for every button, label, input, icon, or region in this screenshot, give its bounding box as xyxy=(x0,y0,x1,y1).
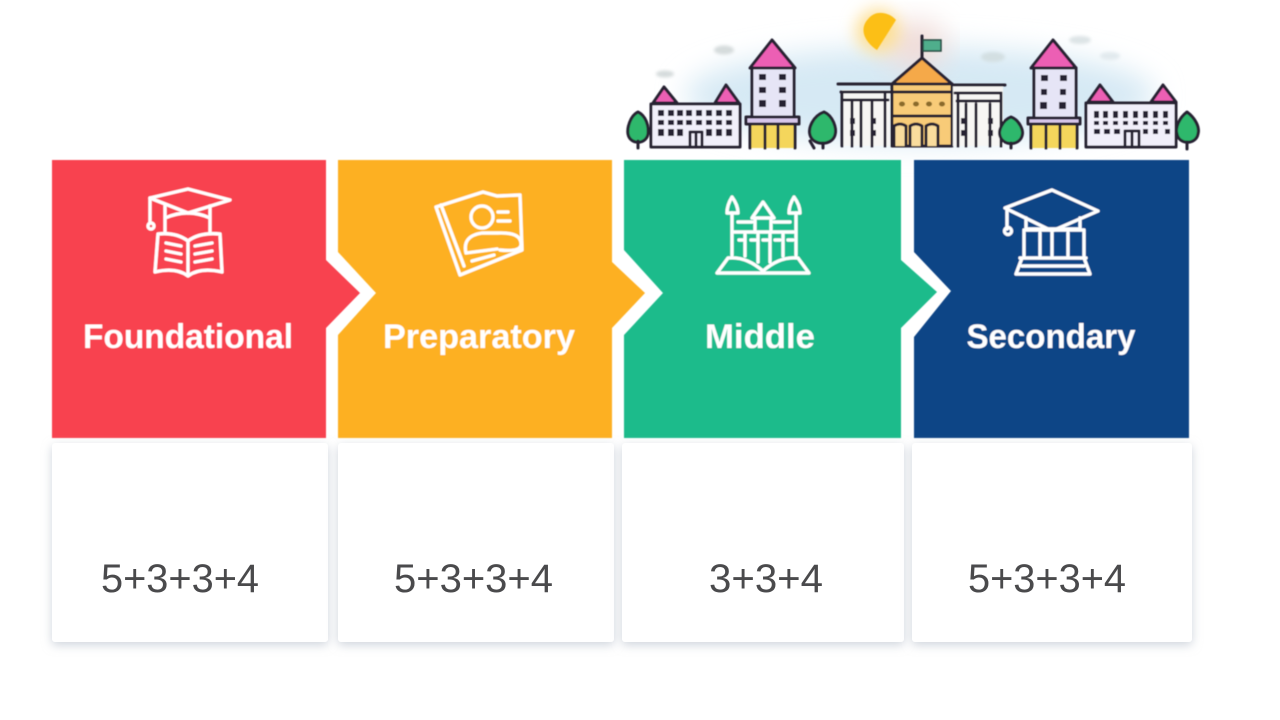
panel: Preparatory stage xyxy=(338,160,645,438)
card: Middle structure xyxy=(622,443,904,642)
value: 5+3+3+4 xyxy=(101,557,259,601)
icon: tree 3 xyxy=(1000,117,1022,148)
value: 5+3+3+4 xyxy=(968,557,1126,601)
building: right school xyxy=(1086,85,1176,147)
icon: sun xyxy=(856,9,900,53)
building: right colonnade xyxy=(953,85,1005,146)
panel: Middle stage xyxy=(624,160,937,438)
icon: graduation cap over open book xyxy=(148,189,230,276)
value: 3+3+4 xyxy=(709,557,823,601)
building: tower 1 xyxy=(746,40,799,148)
icon: graduation cap over institution xyxy=(1004,190,1098,274)
illustration: campus skyline xyxy=(628,9,1198,149)
icon: tree 4 xyxy=(1176,112,1198,149)
foundational header xyxy=(52,160,360,438)
building: left colonnade xyxy=(838,84,890,146)
building: left school xyxy=(651,85,740,147)
label: Secondary: Secondary xyxy=(966,318,1136,356)
card: Secondary structure xyxy=(912,443,1192,642)
icon: book with student profile xyxy=(436,192,522,275)
background haze and clouds xyxy=(656,21,1155,143)
icon: tree 1 xyxy=(628,112,648,148)
card: Foundational structure xyxy=(52,443,328,642)
preparatory header xyxy=(338,160,645,438)
building: central hall xyxy=(892,36,952,146)
value: 5+3+3+4 xyxy=(394,557,553,601)
label: Middle: Middle xyxy=(705,318,815,356)
building: tower 2 xyxy=(1028,40,1080,148)
panel: Foundational stage xyxy=(52,160,360,438)
card: Preparatory structure xyxy=(338,443,614,642)
panel: Secondary stage xyxy=(914,160,1189,438)
secondary header xyxy=(914,160,1189,438)
flag xyxy=(922,36,941,58)
middle header xyxy=(624,160,937,438)
label: Preparatory: Preparatory xyxy=(383,318,575,356)
label: Foundational: Foundational xyxy=(83,318,293,356)
icon: castle on open book xyxy=(717,197,809,273)
icon: tree 2 xyxy=(810,112,836,148)
